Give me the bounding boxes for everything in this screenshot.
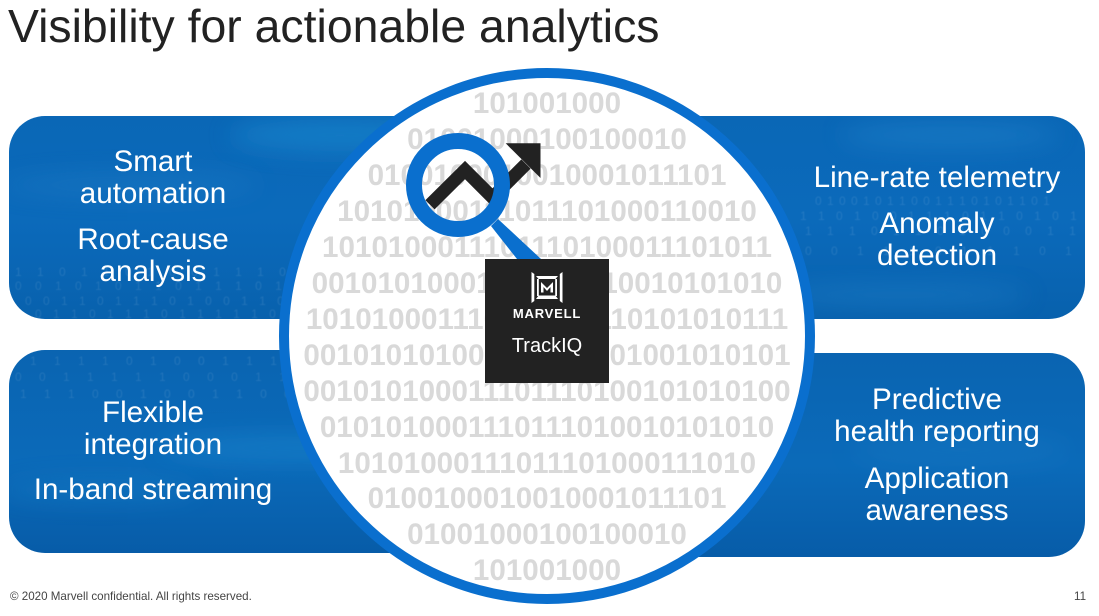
binary data text: 0101010001110111010010101010 — [320, 411, 774, 444]
panel text: top right: Line-rate telemetry — [814, 161, 1061, 194]
panel: top right — [700, 116, 1085, 319]
panel: top left: 0 0 1 1 0 1 1 1 0 1 0 0 1 1 0 0 1 1 1 1 0 1 0 1 — [25, 294, 450, 308]
panel text: bottom right: awareness — [865, 494, 1009, 527]
binary data text: 101001000 — [473, 554, 621, 587]
panel text: top right: Anomaly — [879, 207, 995, 240]
title: Visibility for actionable analytics — [8, 0, 660, 52]
panel: top right: 1 1 0 1 0 0 1 1 1 0 1 1 0 1 0 1 1 — [800, 209, 1099, 223]
panel text: top left: analysis — [100, 255, 206, 288]
panel: bottom left: 0 0 1 1 1 1 1 0 0 0 1 1 1 1 0 1 1 — [15, 370, 413, 384]
panel: top left: 1 1 0 1 1 0 1 0 0 1 1 1 0 1 1 1 0 1 — [15, 265, 402, 279]
panel: top left: 0 0 1 0 1 0 1 1 0 1 1 1 0 1 0 1 0 1 0 1 1 — [15, 279, 427, 293]
panel: bottom left: 1 1 1 0 0 1 0 0 1 1 0 0 1 1 0 1 — [20, 387, 394, 401]
icon: magnifying glass — [414, 141, 541, 259]
binary data text: 101001000 — [473, 87, 621, 120]
binary data text: 101010001110111010110101010111 — [306, 303, 788, 336]
panel: bottom left: 1 1 1 1 0 1 0 0 1 1 1 1 1 1 0 1 1 — [30, 354, 428, 368]
panel text: bottom right: health reporting — [834, 415, 1040, 448]
panel text: top left: Smart — [114, 145, 192, 178]
icon: rising arrow — [430, 143, 540, 205]
binary data text: 01001000100100010 — [407, 123, 687, 156]
panel text: bottom left — [34, 396, 272, 506]
panel text: top left: automation — [80, 177, 226, 210]
panel: bottom left — [9, 350, 390, 553]
binary data text: 10101000111011101000110010 — [337, 195, 757, 228]
binary data text — [303, 87, 791, 587]
Marvell TrackIQ box — [485, 259, 609, 383]
icon: Marvell logo — [532, 272, 562, 303]
panel text: top left — [77, 145, 229, 288]
central circle — [284, 73, 810, 599]
footer: copyright: © 2020 Marvell confidential. All rights reserved. — [10, 590, 252, 603]
panel text: bottom left: integration — [84, 428, 222, 461]
panel: top left — [9, 116, 394, 319]
panel: bottom right — [698, 353, 1085, 557]
binary data text: 0100100010010001011101 — [368, 482, 726, 515]
panel text: bottom right — [834, 383, 1040, 527]
panel text: top right — [814, 161, 1061, 272]
footer: page number: 11 — [1074, 590, 1086, 603]
binary data text: 00101010001110111010010101010 — [312, 267, 782, 300]
panel text: bottom left: In-band streaming — [34, 473, 272, 506]
binary data text: 1010100011101110100011101011 — [322, 231, 772, 264]
panel text: bottom left: Flexible — [102, 396, 204, 429]
TrackIQ label: TrackIQ — [512, 335, 582, 357]
binary data text: 10101000111011101000111010 — [338, 447, 756, 480]
panel: top left: 0 1 1 0 1 1 1 0 1 1 1 1 1 0 0 1 1 1 1 1 1 0 — [35, 307, 424, 321]
panel text: top left: Root-cause — [77, 223, 229, 256]
panel: top right: 0 1 0 0 1 0 1 1 0 0 1 1 1 0 1 0 1 1 0 1 — [815, 194, 1051, 208]
panel text: top right: detection — [877, 239, 997, 272]
Marvell wordmark: MARVELL — [513, 306, 581, 321]
binary data text: 001010100011101110100101010100 — [303, 375, 791, 408]
panel text: bottom right: Predictive — [872, 383, 1002, 416]
panel text: bottom right: Application — [865, 462, 1009, 495]
binary data text: 001010101001110111001001010101 — [303, 339, 791, 372]
binary data text: 01001000100100010 — [407, 518, 687, 551]
binary data text: 0100100010010001011101 — [368, 159, 726, 192]
